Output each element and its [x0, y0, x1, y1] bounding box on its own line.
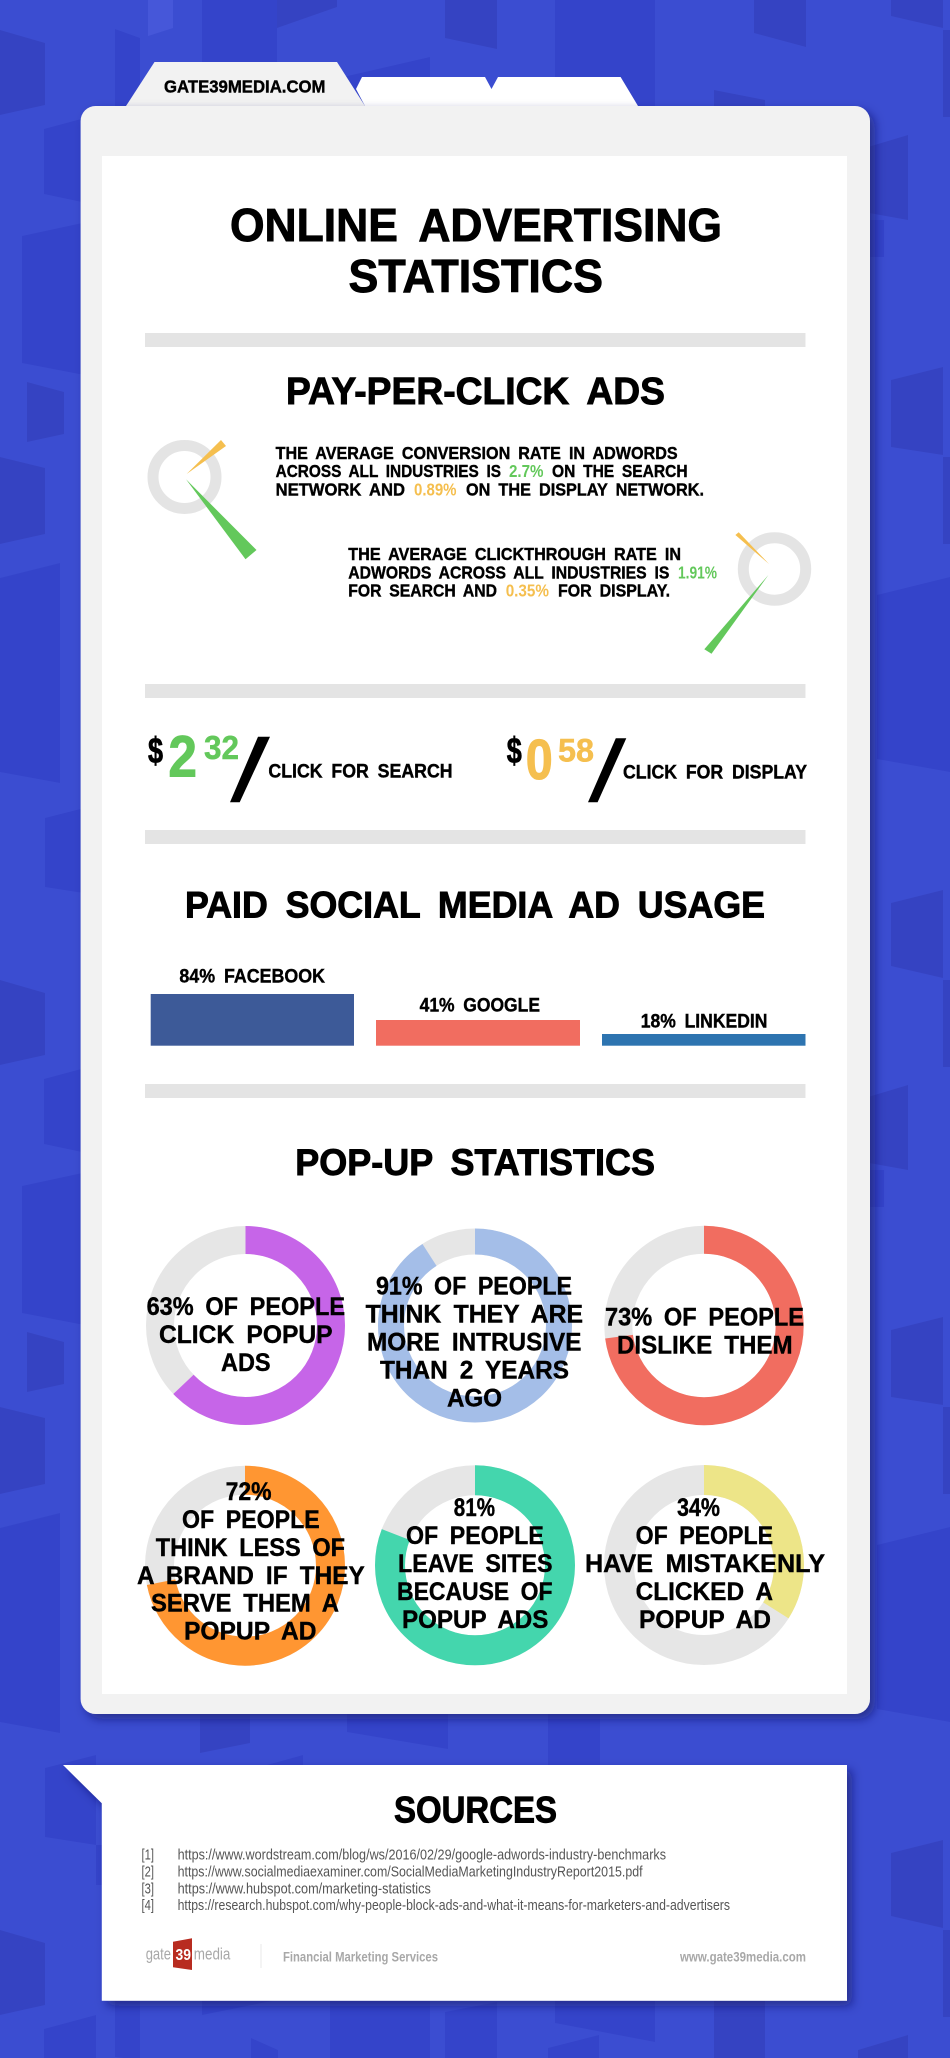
bar chart: social ad usage: [151, 966, 805, 1046]
donut chart: 73% dislike them: 73% OF PEOPLE: [605, 1303, 804, 1331]
text: conversion rate: THE AVERAGE CONVERSION RATE IN ADWORDS: [276, 443, 678, 463]
bar: facebook: [151, 966, 354, 1046]
panel: sources: [63, 1765, 847, 2001]
heading: paid social media ad usage: PAID SOCIAL MEDIA AD USAGE: [185, 885, 765, 926]
stat: cost per click for display: [507, 729, 807, 802]
text: conversion rate: ON THE DISPLAY NETWORK.: [466, 479, 704, 499]
logo: gate39media: media: [194, 1945, 231, 1963]
donut chart: 91% more intrusive: THINK THEY ARE: [366, 1301, 583, 1329]
source list: https://www.hubspot.com/marketing-statistics: [178, 1882, 431, 1898]
donut chart: 63% click popup ads: ADS: [221, 1349, 271, 1377]
text: clickthrough rate: FOR SEARCH AND: [348, 581, 497, 601]
logo: gate39media: [146, 1938, 231, 1970]
donut chart: 81% leave sites: 81%: [454, 1494, 495, 1522]
donut chart: 81% leave sites: OF PEOPLE: [406, 1522, 544, 1550]
panel: main card: [81, 106, 870, 1714]
icon: conversion rate gauge: [153, 440, 256, 559]
text: conversion rate: ACROSS ALL INDUSTRIES IS: [276, 461, 501, 481]
text: conversion rate: ON THE SEARCH: [552, 461, 688, 481]
donut chart: 34% mistakenly clicked: POPUP AD: [639, 1606, 771, 1634]
title: [230, 199, 722, 302]
donut chart: 72% think less of a brand: 72%: [226, 1478, 272, 1506]
source list: [1]: [142, 1848, 154, 1864]
bar: google: [376, 995, 580, 1046]
donut chart: 72% think less of a brand: [137, 1478, 365, 1651]
text: clickthrough rate: 0.35%: [506, 581, 549, 601]
icon: clickthrough rate gauge: [704, 532, 806, 654]
donut chart: 72% think less of a brand: OF PEOPLE: [182, 1506, 320, 1534]
stat: cost per click for display: $: [507, 730, 522, 771]
bar: facebook: 84% FACEBOOK: [179, 966, 325, 988]
card frame: [81, 106, 870, 1714]
donut chart: 72% think less of a brand: THINK LESS OF: [156, 1534, 345, 1562]
text: clickthrough rate: 1.91%: [678, 562, 717, 582]
text: clickthrough rate: [348, 544, 717, 601]
donut chart: 63% click popup ads: [147, 1240, 345, 1411]
title: STATISTICS: [348, 250, 603, 302]
stat: cost per click for search: 2: [168, 725, 197, 790]
bar: google: 41% GOOGLE: [420, 995, 540, 1017]
source list: [3]: [142, 1882, 154, 1898]
text: clickthrough rate: ADWORDS ACROSS ALL INDUSTRIES IS: [348, 562, 669, 582]
stat: cost per click for display: 0: [526, 729, 553, 792]
source list: https://www.wordstream.com/blog/ws/2016/02/29/google-adwords-industry-benchmarks: [178, 1848, 666, 1864]
stat: cost per click for display: 58: [558, 733, 594, 769]
stat: cost per click for search: $: [148, 730, 163, 771]
heading: pop-up statistics: POP-UP STATISTICS: [295, 1142, 655, 1183]
donut chart: 34% mistakenly clicked: CLICKED A: [636, 1578, 773, 1606]
donut chart: 34% mistakenly clicked: OF PEOPLE: [636, 1522, 773, 1550]
bar: linkedin: 18% LINKEDIN: [641, 1011, 768, 1033]
card inner sheet: [102, 156, 847, 1694]
donut chart: 73% dislike them: [605, 1240, 804, 1411]
tab: gate39media.com: [126, 62, 365, 106]
footer website: www.gate39media.com: [679, 1950, 806, 1965]
title: ONLINE ADVERTISING: [230, 199, 722, 251]
sources sheet: [63, 1765, 847, 2001]
source list: https://research.hubspot.com/why-people-block-ads-and-what-it-means-for-marketers-and-advertisers: [178, 1898, 730, 1914]
donut chart: 34% mistakenly clicked: [585, 1480, 825, 1650]
text: conversion rate: 0.89%: [414, 479, 456, 499]
source list: [142, 1848, 730, 1914]
text: conversion rate: NETWORK AND: [276, 479, 405, 499]
donut chart: 34% mistakenly clicked: HAVE MISTAKENLY: [585, 1550, 825, 1578]
folder tabs: [126, 62, 638, 106]
tab: white right: [356, 77, 638, 106]
footer tagline: Financial Marketing Services: [283, 1950, 438, 1965]
donut chart: 91% more intrusive: MORE INTRUSIVE: [367, 1329, 581, 1357]
source list: [4]: [142, 1898, 154, 1914]
stat: cost per click for display: CLICK FOR DISPLAY: [623, 762, 807, 783]
donut chart: 72% think less of a brand: A BRAND IF THEY: [137, 1562, 365, 1590]
donut chart: 81% leave sites: POPUP ADS: [402, 1606, 548, 1634]
donut chart: 81% leave sites: BECAUSE OF: [397, 1578, 552, 1606]
donut chart: 72% think less of a brand: SERVE THEM A: [151, 1590, 339, 1618]
heading: sources: SOURCES: [394, 1790, 557, 1831]
stat: cost per click for search: 32: [204, 730, 239, 767]
tab: gate39media.com: GATE39MEDIA.COM: [164, 76, 326, 96]
donut chart: 91% more intrusive: THAN 2 YEARS: [380, 1357, 569, 1385]
donut chart: 63% click popup ads: 63% OF PEOPLE: [147, 1293, 345, 1321]
logo: gate39media: gate: [146, 1945, 171, 1963]
source list: [2]: [142, 1864, 154, 1880]
donut chart: 72% think less of a brand: POPUP AD: [184, 1618, 316, 1646]
donut chart: 73% dislike them: DISLIKE THEM: [617, 1331, 793, 1359]
donut chart: 91% more intrusive: AGO: [447, 1385, 502, 1413]
text: conversion rate: [276, 443, 704, 499]
logo: gate39media: 39: [176, 1947, 191, 1964]
heading: pay-per-click ads: PAY-PER-CLICK ADS: [286, 371, 665, 413]
text: clickthrough rate: THE AVERAGE CLICKTHROUGH RATE IN: [348, 544, 681, 564]
stat: cost per click for search: [148, 725, 453, 802]
donut chart: 81% leave sites: [390, 1480, 560, 1650]
source list: https://www.socialmediaexaminer.com/SocialMediaMarketingIndustryReport2015.pdf: [178, 1864, 643, 1880]
text: clickthrough rate: FOR DISPLAY.: [558, 581, 670, 601]
bar: linkedin: [602, 1011, 806, 1046]
donut chart: 91% more intrusive: [366, 1242, 583, 1413]
donut chart: 63% click popup ads: CLICK POPUP: [159, 1321, 333, 1349]
stat: cost per click for search: CLICK FOR SEARCH: [268, 761, 453, 782]
donut chart: 34% mistakenly clicked: 34%: [677, 1494, 720, 1522]
donut chart: 91% more intrusive: 91% OF PEOPLE: [376, 1273, 572, 1301]
donut chart: 81% leave sites: LEAVE SITES: [398, 1550, 552, 1578]
text: conversion rate: 2.7%: [509, 461, 544, 481]
